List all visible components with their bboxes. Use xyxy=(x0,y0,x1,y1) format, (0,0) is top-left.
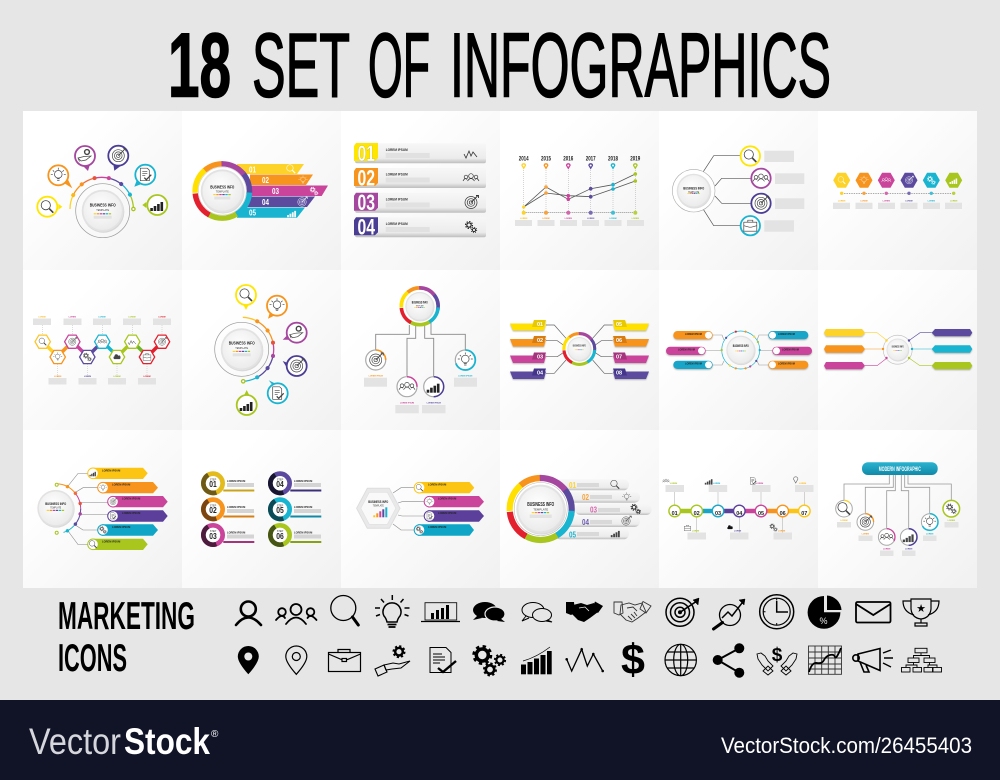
pills left xyxy=(666,331,713,369)
node: chart xyxy=(424,377,444,397)
center disc: TEMPLATE xyxy=(96,208,109,212)
bar numbers: 05 xyxy=(569,530,576,540)
step 02 xyxy=(201,497,225,522)
brand logo: Vector xyxy=(29,721,121,762)
step captions: LOREM IPSUM xyxy=(227,505,245,509)
captions: LOREM xyxy=(609,218,617,220)
connectors xyxy=(706,335,772,365)
ribbons left: 04 xyxy=(537,370,544,376)
ribbons right xyxy=(613,320,649,379)
year labels: 2015 xyxy=(541,156,551,162)
step 05: 05 xyxy=(276,506,284,515)
icon: document check xyxy=(430,648,456,672)
title xyxy=(168,16,831,116)
panel 15: hexagon with four arrow ribbons xyxy=(341,430,500,588)
tab 01: 01 xyxy=(358,141,375,166)
ribbon labels: LOREM IPSUM xyxy=(438,496,456,500)
icon: search xyxy=(331,596,358,625)
ribbon labels: LOREM IPSUM xyxy=(112,525,130,529)
stems and captions: LOREM xyxy=(756,483,764,485)
rounded bars xyxy=(555,479,652,539)
captions: LOREM xyxy=(948,520,955,522)
icon: trophy: ★ xyxy=(916,603,926,615)
pins xyxy=(521,163,638,170)
captions: LOREM xyxy=(565,218,572,220)
connector arc with dots xyxy=(198,306,285,393)
icon: dollar: $ xyxy=(621,636,645,684)
ribbon labels: LOREM IPSUM xyxy=(102,540,120,544)
pill labels xyxy=(678,333,799,366)
ribbons: 05 xyxy=(249,208,256,218)
icon: chat filled xyxy=(473,602,505,622)
icon: rising bars xyxy=(521,647,552,674)
panel 9: org tree from ring xyxy=(341,270,500,430)
heading: marketing icons: MARKETING xyxy=(58,595,195,638)
chain band xyxy=(675,509,804,513)
captions xyxy=(837,520,958,556)
heading: marketing icons xyxy=(58,595,195,680)
center hexagon: TEMPLATE xyxy=(373,503,384,507)
captions: LOREM xyxy=(520,218,528,220)
node: briefcase xyxy=(741,216,760,235)
icon: light bulb xyxy=(375,595,410,627)
icon: hands with dollar xyxy=(757,645,797,675)
ribbons right: 08 xyxy=(616,370,622,376)
tab 02: LOREM IPSUM xyxy=(386,172,408,176)
bar numbers: 03 xyxy=(590,506,597,514)
ribbon labels: LOREM IPSUM xyxy=(122,496,140,500)
center disc: BUSINESS INFO xyxy=(90,203,116,209)
captions: LOREM xyxy=(587,218,595,220)
big ring xyxy=(497,465,584,553)
captions: LOREM xyxy=(928,200,935,202)
panel 13: arc with six arrow ribbons xyxy=(20,430,182,588)
tree connectors xyxy=(844,475,951,528)
center disc xyxy=(76,184,130,238)
year labels xyxy=(519,156,641,162)
data markers xyxy=(522,172,637,215)
ribbons left xyxy=(824,329,865,369)
icon: zigzag line xyxy=(565,648,604,672)
chain nodes xyxy=(669,505,810,517)
big ring: BUSINESS INFO xyxy=(527,502,554,508)
connector arc with dots xyxy=(57,164,146,254)
step 01 xyxy=(201,471,225,496)
pill labels: LOREM IPSUM xyxy=(685,333,702,336)
step 04 xyxy=(268,471,292,496)
ribbons left: 01 xyxy=(537,322,543,328)
pills right xyxy=(768,331,812,369)
icon: envelope xyxy=(856,602,890,622)
ribbons: 03 xyxy=(272,187,279,196)
icon: hand with gear xyxy=(375,646,410,676)
step captions: LOREM IPSUM xyxy=(227,530,245,534)
small icons xyxy=(662,477,798,531)
captions: LOREM xyxy=(838,200,846,202)
node: team xyxy=(878,529,895,545)
year labels: 2014 xyxy=(519,156,529,162)
panel 6: hexagon timeline xyxy=(818,111,977,270)
ribbons right: 06 xyxy=(616,338,622,344)
center hub xyxy=(883,335,912,364)
stems and captions: LOREM xyxy=(670,483,678,485)
footer bar xyxy=(0,700,1000,780)
tab 01: LOREM IPSUM xyxy=(386,147,408,152)
captions: LOREM xyxy=(883,200,890,202)
connectors xyxy=(393,488,424,530)
hub dots xyxy=(882,339,913,359)
captions: LOREM xyxy=(840,520,848,522)
icon: pie chart xyxy=(808,596,842,629)
connector lines xyxy=(546,325,613,373)
hub circle: TEMPLATE xyxy=(688,190,699,194)
node: team xyxy=(751,169,771,188)
center ring xyxy=(558,327,601,371)
center disc: BUSINESS INFO xyxy=(229,340,255,346)
brand logo: Stock xyxy=(124,721,210,762)
captions: LOREM xyxy=(862,534,869,536)
pill labels: LOREM IPSUM xyxy=(782,348,799,352)
pill labels: LOREM IPSUM xyxy=(778,333,795,336)
heading: marketing icons: ICONS xyxy=(58,637,127,680)
icon: globe xyxy=(665,644,696,676)
tab 03 xyxy=(354,190,486,215)
panel 17: seven step chain xyxy=(659,430,818,588)
bubble: target xyxy=(283,356,307,376)
ribbon labels xyxy=(428,482,456,529)
chain numbers: 03 xyxy=(715,511,721,517)
hexagons xyxy=(833,173,962,188)
hexagon nodes xyxy=(35,335,170,364)
panel 4: line chart 2014-2019 xyxy=(500,111,659,270)
captions: LOREM xyxy=(950,200,958,202)
connector lines xyxy=(703,156,751,226)
title: SET xyxy=(252,16,350,116)
ribbon labels: LOREM IPSUM xyxy=(102,468,120,472)
icon: team xyxy=(276,604,316,624)
tab 04 xyxy=(354,215,486,240)
year labels: 2016 xyxy=(563,156,574,162)
step 02: STEP xyxy=(210,504,217,507)
bubble: idea xyxy=(267,296,287,319)
hexagon icons xyxy=(39,338,166,361)
bar numbers: 02 xyxy=(582,493,589,502)
panel 16: large ring with rounded bars xyxy=(497,430,659,588)
ribbons right: 07 xyxy=(616,354,622,360)
step captions: LOREM IPSUM xyxy=(294,530,312,534)
ribbon labels: LOREM IPSUM xyxy=(122,511,140,515)
ribbons: 04 xyxy=(262,198,269,207)
bubble: idea xyxy=(48,165,72,188)
step 04: 04 xyxy=(276,480,284,489)
center dotted ring xyxy=(721,330,761,370)
node: target xyxy=(857,514,874,530)
stems and captions: LOREM xyxy=(158,316,166,318)
icon: share xyxy=(713,643,744,678)
bubble: search xyxy=(37,197,62,217)
captions: LOREM xyxy=(632,218,639,220)
captions xyxy=(833,200,962,209)
panel 2: ring with slanted ribbons xyxy=(182,111,341,270)
title: 18 xyxy=(168,16,231,116)
icon: target arrow xyxy=(666,598,699,626)
stems and captions: LOREM xyxy=(778,530,786,532)
panel 1: speech bubble arc xyxy=(23,111,182,270)
panel 10: eight ribbon hub xyxy=(500,270,659,430)
panel 14: six step circles xyxy=(182,430,341,588)
panel 5: hub with four ring nodes xyxy=(659,111,818,270)
chain numbers: 01 xyxy=(672,511,678,517)
stems and captions xyxy=(33,316,171,384)
step 01: STEP xyxy=(210,478,217,481)
icon: handshake filled xyxy=(566,602,603,622)
stems and captions: LOREM xyxy=(713,483,721,485)
chain numbers xyxy=(672,511,807,517)
captions: LOREM IPSUM xyxy=(400,402,414,404)
captions: LOREM IPSUM xyxy=(369,376,383,378)
chain numbers: 07 xyxy=(801,511,807,517)
tree connectors xyxy=(376,323,465,376)
captions: LOREM xyxy=(926,534,934,536)
step 03: 03 xyxy=(209,532,217,541)
ribbons xyxy=(414,482,484,536)
tab 02 xyxy=(354,166,486,190)
ribbon labels: LOREM IPSUM xyxy=(428,525,446,529)
stems and captions: LOREM xyxy=(734,530,742,532)
step 06: STEP xyxy=(277,530,284,533)
icon: chat outline xyxy=(522,602,552,622)
chart lines xyxy=(524,174,635,207)
icon: handshake outline xyxy=(614,602,651,622)
captions: LOREM xyxy=(883,548,891,550)
ribbons xyxy=(237,164,328,218)
step 02: 02 xyxy=(209,506,217,515)
captions: LOREM xyxy=(905,200,913,202)
stems and captions: LOREM xyxy=(84,376,91,378)
top ring: TEMPLATE xyxy=(416,304,424,307)
node: target xyxy=(366,350,386,370)
step 01: 01 xyxy=(209,480,217,489)
chain numbers: 05 xyxy=(758,511,764,517)
icon: org chart xyxy=(902,648,942,672)
node: team xyxy=(397,377,417,397)
icon: trophy xyxy=(903,599,939,626)
captions: LOREM xyxy=(542,218,550,220)
tab 03: 03 xyxy=(358,190,375,215)
ribbons xyxy=(88,468,168,550)
step 04: STEP xyxy=(277,478,284,481)
icon: person xyxy=(236,602,261,625)
tab 03: LOREM IPSUM xyxy=(386,196,408,202)
panel 7: zigzag hexagon chain xyxy=(23,270,182,430)
tab 04: LOREM IPSUM xyxy=(386,221,408,226)
chain numbers: 02 xyxy=(694,511,700,517)
captions: LOREM xyxy=(905,548,913,550)
bar labels xyxy=(577,483,620,536)
icon: pie chart: % xyxy=(819,616,828,626)
bar numbers xyxy=(569,481,597,540)
stems and captions: LOREM xyxy=(98,316,106,318)
stock reference: VectorStock.com/26455403 xyxy=(721,733,972,758)
bar icons xyxy=(611,480,641,537)
title pill xyxy=(862,462,938,475)
captions: LOREM xyxy=(860,200,868,202)
bubble: chart xyxy=(142,195,167,215)
center disc: TEMPLATE xyxy=(50,505,61,509)
stems and captions: LOREM xyxy=(113,376,121,378)
stems and captions: LOREM xyxy=(128,316,136,318)
hub circle: BUSINESS INFO xyxy=(683,186,704,191)
stems and captions: LOREM xyxy=(54,376,62,378)
stems and captions: LOREM xyxy=(69,316,76,318)
circular ring: TEMPLATE xyxy=(216,190,229,194)
captions: LOREM IPSUM xyxy=(458,376,473,378)
center disc xyxy=(215,322,269,376)
stems and captions xyxy=(666,483,814,540)
icon: map pin outline xyxy=(286,646,307,674)
top ring xyxy=(394,280,446,332)
ribbons left xyxy=(510,320,546,379)
panel 8: vertical bubble arc xyxy=(182,270,341,430)
step 05: STEP xyxy=(277,504,284,507)
connectors xyxy=(68,474,108,544)
center disc: TEMPLATE xyxy=(235,346,248,350)
brand logo xyxy=(29,721,219,762)
text placeholders xyxy=(764,151,804,232)
node: idea xyxy=(455,350,475,370)
step 03: STEP xyxy=(210,530,217,533)
center disc: BUSINESS INFO xyxy=(45,501,66,506)
ribbon labels: LOREM IPSUM xyxy=(428,482,446,486)
node: idea xyxy=(921,514,938,530)
panel 18: modern infographic tree xyxy=(818,430,977,588)
bubble: search xyxy=(236,285,256,310)
ribbons right xyxy=(932,329,972,369)
node: chart xyxy=(900,529,917,545)
title pill: MODERN INFOGRAPHIC xyxy=(879,467,921,473)
dotted timeline xyxy=(840,192,955,195)
stems and captions: LOREM xyxy=(692,530,700,532)
chain numbers: 06 xyxy=(780,511,786,517)
step 05 xyxy=(268,497,292,522)
brand logo: ® xyxy=(211,729,219,740)
circular ring: BUSINESS INFO xyxy=(210,184,235,190)
center hexagon: BUSINESS INFO xyxy=(368,499,388,504)
bubble: document xyxy=(134,165,155,187)
circular ring xyxy=(184,153,261,229)
step 06 xyxy=(268,523,292,547)
step captions xyxy=(223,479,321,543)
bubble: chart xyxy=(237,390,257,415)
icon: briefcase xyxy=(328,650,360,672)
bar numbers: 04 xyxy=(582,518,589,527)
icon: growth magnifier xyxy=(714,599,745,629)
panel 3: numbered tabs xyxy=(341,111,500,270)
ribbons right: 05 xyxy=(616,322,622,328)
title: OF xyxy=(368,16,430,116)
step 06: 06 xyxy=(276,532,284,541)
step captions: LOREM IPSUM xyxy=(227,479,245,483)
bubble: hand xyxy=(75,146,95,171)
ribbon labels: LOREM IPSUM xyxy=(438,511,456,515)
node: target xyxy=(751,194,771,213)
icon: hands with dollar: $ xyxy=(772,645,783,666)
icon: chart grid xyxy=(808,646,842,674)
step 03 xyxy=(201,523,225,547)
node: search xyxy=(741,146,760,166)
year labels: 2017 xyxy=(586,156,596,162)
panel 11: pills around dotted ring xyxy=(659,270,818,430)
tab 02: 02 xyxy=(358,166,375,190)
pill labels: LOREM IPSUM xyxy=(678,348,695,352)
ribbons: 02 xyxy=(262,176,269,185)
center disc xyxy=(37,490,75,528)
bubble: target xyxy=(108,146,128,171)
stems and captions: LOREM xyxy=(38,316,46,318)
bar numbers: 01 xyxy=(569,481,576,490)
tab 04: 04 xyxy=(358,215,376,240)
icon: map pin filled xyxy=(238,646,259,674)
ribbon labels xyxy=(102,468,140,544)
bubble: hand xyxy=(283,323,307,343)
ribbons: 01 xyxy=(249,166,256,174)
captions xyxy=(364,376,477,413)
node: search xyxy=(836,500,852,517)
ribbons left: 03 xyxy=(537,354,543,360)
ribbons left: 02 xyxy=(537,338,543,344)
panel 12: arrow ribbons with coloured lines xyxy=(818,270,977,430)
connectors xyxy=(47,346,158,352)
center hexagon xyxy=(357,488,400,528)
captions xyxy=(515,218,644,226)
connectors xyxy=(865,333,932,366)
icon: megaphone xyxy=(853,648,893,672)
step captions: LOREM IPSUM xyxy=(294,479,312,483)
center ring: BUSINESS INFO xyxy=(573,344,586,348)
center hub: BUSINESS INFO xyxy=(892,345,904,349)
arc with dots xyxy=(20,473,91,544)
ribbon labels: LOREM IPSUM xyxy=(112,482,130,486)
center dotted ring: BUSINESS INFO xyxy=(733,344,749,348)
node: gears xyxy=(943,500,960,517)
stems and captions: LOREM xyxy=(799,483,807,485)
drop lines and baseline xyxy=(524,168,635,213)
big ring: TEMPLATE xyxy=(533,508,548,512)
pill labels: LOREM IPSUM xyxy=(778,363,795,366)
icon: gears xyxy=(474,646,505,676)
hub circle xyxy=(672,169,715,212)
year labels: 2018 xyxy=(608,156,618,162)
icon: clock xyxy=(760,595,794,629)
chain numbers: 04 xyxy=(736,511,743,517)
bubble: document xyxy=(268,380,288,403)
top ring: BUSINESS INFO xyxy=(412,300,428,304)
stems and captions: LOREM xyxy=(143,376,151,378)
icon: laptop chart xyxy=(421,603,460,622)
step captions: LOREM IPSUM xyxy=(294,505,312,509)
pill labels: LOREM IPSUM xyxy=(685,363,702,366)
captions: LOREM IPSUM xyxy=(427,402,441,404)
year labels: 2019 xyxy=(630,156,641,162)
tab 01 xyxy=(354,141,486,166)
